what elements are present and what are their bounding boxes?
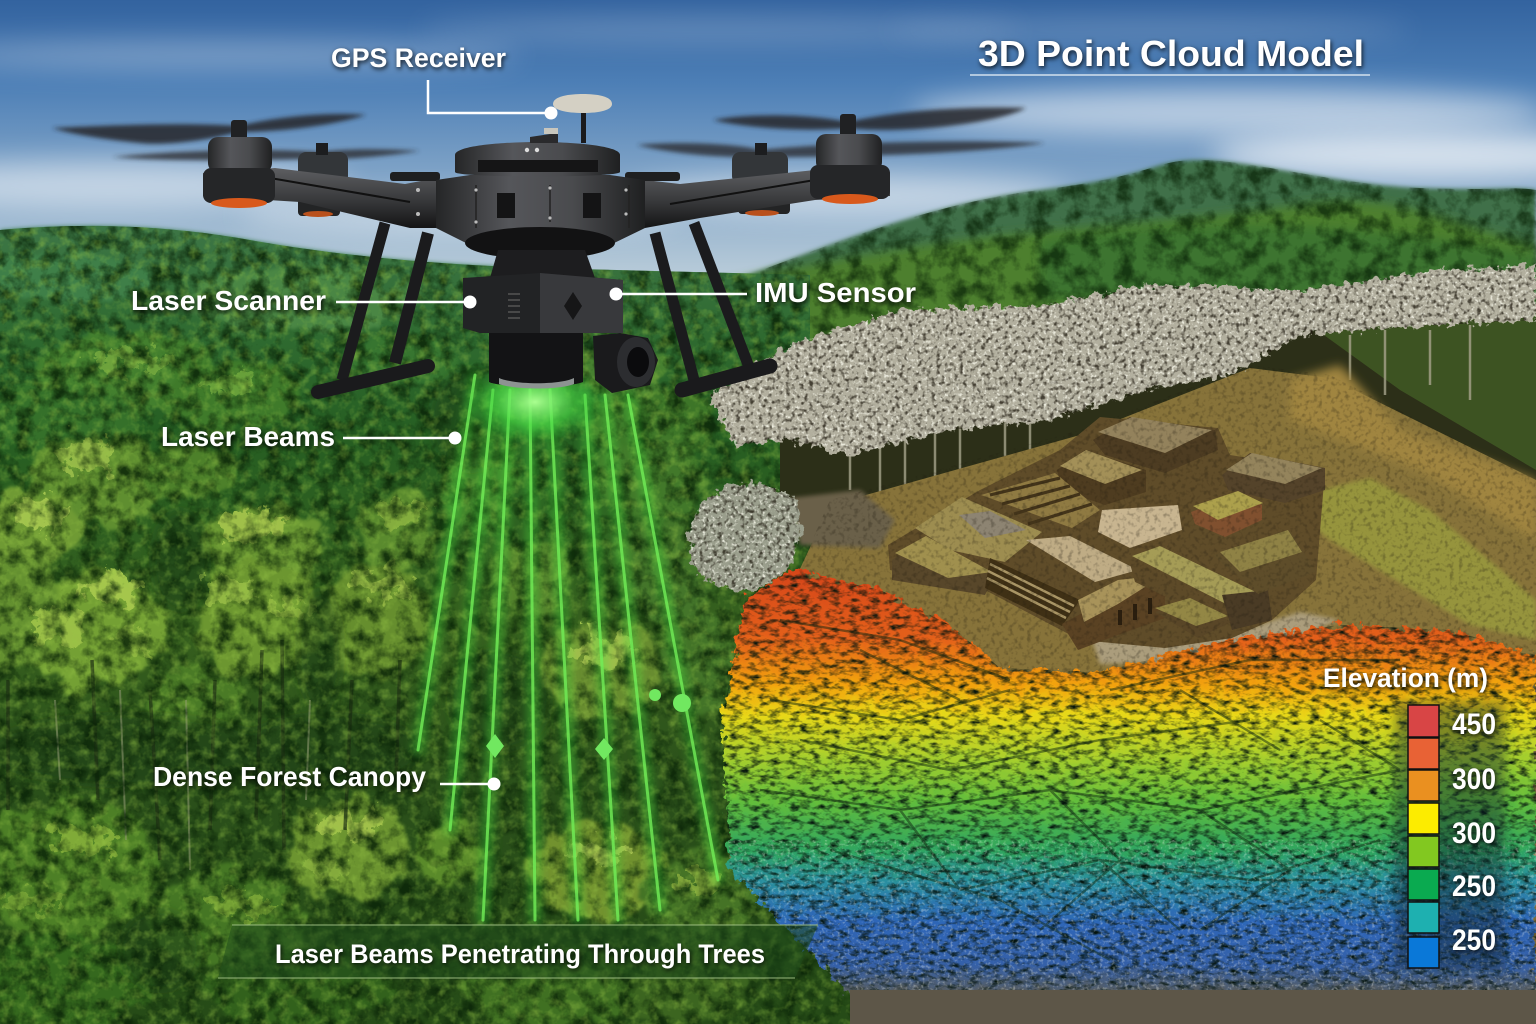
- clouds: [0, 18, 1536, 233]
- land base: [0, 225, 1536, 1024]
- grand staircase: [985, 558, 1080, 626]
- upper ruin: [1093, 417, 1218, 473]
- blossom point cluster: [689, 483, 800, 590]
- tree trunks: [8, 640, 400, 870]
- sunlit tree crowns: [2, 350, 724, 917]
- terrain texture overlay: [680, 260, 1536, 1010]
- right plaza: [1098, 505, 1182, 548]
- beam glow: [418, 375, 718, 920]
- gimbal neck: [490, 250, 595, 278]
- scale values: 300: [1452, 763, 1496, 796]
- bottom soil strip: [850, 990, 1536, 1024]
- terrain block lines: [760, 620, 1400, 960]
- central body: [416, 175, 645, 259]
- caption bar: [218, 925, 818, 978]
- grassy mound: [1280, 478, 1536, 640]
- shadow gaps under canopy: [0, 370, 550, 990]
- distant forested hills: [0, 160, 1536, 400]
- top dome housing: [455, 142, 620, 176]
- label: Dense Forest Canopy: Dense Forest Canopy: [153, 761, 426, 792]
- left arm: [203, 168, 440, 228]
- scale values: [1452, 708, 1496, 957]
- elevation legend: [1323, 663, 1505, 970]
- main court: [1026, 536, 1138, 582]
- low platform: [1155, 598, 1231, 638]
- water court: [915, 497, 1042, 562]
- right ruin: [1222, 453, 1325, 503]
- right motor: [810, 114, 890, 204]
- grey rubble slope: [790, 490, 895, 548]
- forest foliage texture: [0, 225, 900, 1024]
- colour scale: [1408, 705, 1439, 968]
- terraced stairs: [981, 473, 1100, 528]
- dense green forest: [0, 225, 900, 1024]
- front tower: [1062, 575, 1165, 650]
- legend backing: [1395, 702, 1505, 970]
- label: Laser Beams: Laser Beams: [161, 421, 335, 452]
- scale values: 450: [1452, 708, 1496, 741]
- drone: [52, 94, 1045, 393]
- label: GPS Receiver: [331, 43, 558, 120]
- white point cloud canopy band: [689, 265, 1536, 590]
- long right wall: [1129, 546, 1272, 630]
- sky background: [0, 0, 1536, 300]
- far propellers: [112, 141, 1045, 160]
- right arm: [625, 170, 890, 228]
- side camera: [593, 333, 658, 393]
- left landing legs: [318, 223, 428, 392]
- label: IMU Sensor: [610, 277, 916, 308]
- near propellers: [52, 108, 1026, 144]
- left motor: [203, 120, 275, 208]
- scale values: 250: [1452, 924, 1496, 957]
- hill foliage texture: [760, 160, 1536, 338]
- temple shadow base: [888, 417, 1325, 648]
- caption text: Laser Beams Penetrating Through Trees: [275, 939, 765, 969]
- scale values: 250: [1452, 870, 1496, 903]
- right steps: [1213, 530, 1316, 594]
- legend heading: Elevation (m): [1323, 663, 1488, 693]
- scale values: 300: [1452, 817, 1496, 850]
- laser scanner housing: [463, 273, 623, 333]
- label: Laser Beams: [161, 421, 462, 452]
- GPS antenna: [530, 94, 612, 143]
- dark understorey behind the ruins: [780, 305, 1536, 520]
- label: Laser Scanner: Laser Scanner: [131, 285, 326, 316]
- scanner lens: [489, 333, 583, 388]
- archaeological ruins on hillside: [790, 365, 1536, 690]
- label: IMU Sensor: IMU Sensor: [755, 277, 916, 308]
- brick building: [1191, 491, 1263, 537]
- left platform: [892, 536, 995, 595]
- label: Laser Scanner: [131, 285, 476, 316]
- cleared sandy ground: [1088, 612, 1340, 664]
- right landing legs: [655, 223, 770, 390]
- green laser beams: [418, 360, 718, 920]
- tree canopies: [0, 255, 760, 1024]
- beam cores: [418, 375, 718, 920]
- elevation colour terrain: [722, 570, 1536, 995]
- label: GPS Receiver: GPS Receiver: [331, 43, 506, 73]
- rear motors: [298, 143, 790, 217]
- laser hit points: [486, 689, 691, 760]
- upper stepped terrace: [1057, 450, 1146, 505]
- title: 3D Point Cloud Model: [978, 33, 1364, 74]
- lens glow: [463, 360, 607, 444]
